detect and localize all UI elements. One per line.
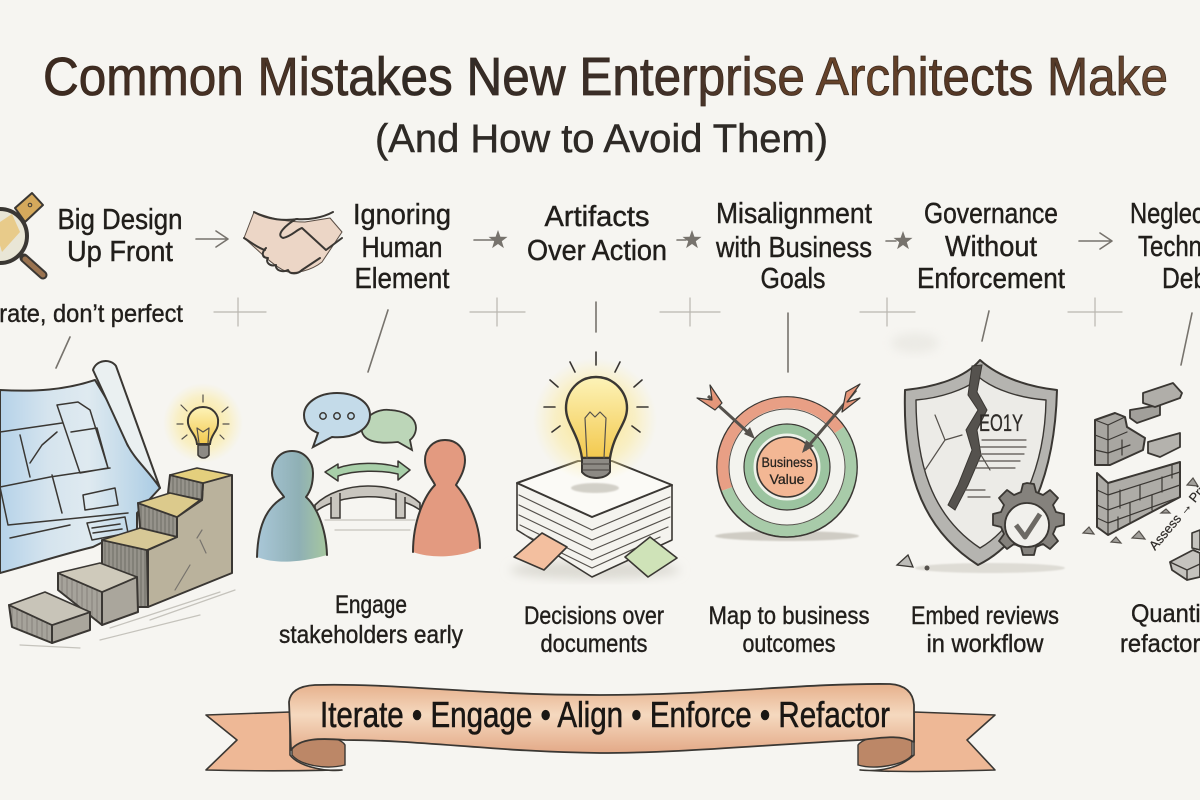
tip: engage stakeholders early: stakeholders early	[279, 621, 463, 649]
shield document label: EO1Y	[979, 410, 1023, 437]
heading: governance without enforcement: Without	[945, 231, 1037, 263]
target label	[762, 454, 812, 487]
flow connectors between mistakes	[56, 230, 1192, 372]
heading: governance without enforcement: Governance	[924, 198, 1058, 230]
heading: neglecting technical debt	[1130, 198, 1200, 295]
banner slogan: Iterate • Engage • Align • Enforce • Refactor	[320, 694, 890, 735]
heading: misalignment with business goals	[715, 198, 872, 295]
heading: misalignment with business goals: Goals	[760, 263, 826, 295]
heading: artifacts over action	[527, 201, 667, 267]
icon: small light bulb	[163, 383, 243, 463]
heading: artifacts over action: Over Action	[527, 235, 667, 267]
heading: big design up front: Big Design	[58, 204, 182, 236]
illustration: paper stack	[510, 461, 680, 579]
illustration: target with arrows	[697, 384, 860, 541]
step 1: big design up front	[0, 193, 243, 648]
step 3: artifacts over action	[510, 201, 680, 658]
summary ribbon banner	[206, 684, 995, 772]
heading: ignoring human element: Ignoring	[353, 199, 451, 231]
tip: decisions over documents: documents	[540, 630, 648, 658]
tip: map to business outcomes	[708, 602, 870, 658]
tip: map to business outcomes: Map to business	[708, 602, 870, 630]
illustration: two people, bridge and speech bubbles	[257, 393, 480, 562]
illustration: stone steps	[9, 468, 235, 648]
tip: embed reviews in workflow	[911, 602, 1059, 658]
icon: ruler and magnifier	[0, 193, 43, 275]
heading: ignoring human element: Element	[354, 263, 450, 295]
heading: governance without enforcement	[917, 198, 1065, 295]
step 2: ignoring human element	[244, 199, 480, 649]
tip: quantify refactoring	[1120, 600, 1200, 658]
tip: decisions over documents	[524, 602, 664, 658]
illustration: cracked shield	[897, 360, 1065, 573]
tip: map to business outcomes: outcomes	[742, 630, 836, 658]
heading: big design up front: Up Front	[67, 236, 173, 268]
tip: engage stakeholders early	[279, 591, 463, 649]
heading: ignoring human element: Human	[362, 232, 442, 264]
subtitle: (And How to Avoid Them)	[375, 117, 828, 161]
icon: handshake	[244, 212, 342, 273]
heading: ignoring human element	[353, 199, 451, 295]
heading: governance without enforcement: Enforcement	[917, 263, 1065, 295]
icon: large light bulb	[533, 352, 657, 482]
heading: misalignment with business goals: with Business	[715, 232, 872, 264]
step 6: neglecting technical debt	[1083, 198, 1200, 658]
illustration: blueprint	[0, 361, 160, 573]
heading: artifacts over action: Artifacts	[544, 201, 650, 233]
target label: Business	[762, 454, 812, 470]
step 5: governance without enforcement	[897, 198, 1065, 658]
tip: embed reviews in workflow: in workflow	[926, 630, 1044, 658]
tip: embed reviews in workflow: Embed reviews	[911, 602, 1059, 630]
target label: Value	[770, 471, 805, 487]
tip: engage stakeholders early: Engage	[335, 591, 407, 619]
illustration: crumbling brick wall	[1083, 383, 1200, 580]
step 4: misalignment with business goals	[697, 198, 872, 658]
tip: decisions over documents: Decisions over	[524, 602, 664, 630]
heading: big design up front	[58, 204, 182, 268]
heading: misalignment with business goals: Misalignment	[716, 198, 872, 230]
